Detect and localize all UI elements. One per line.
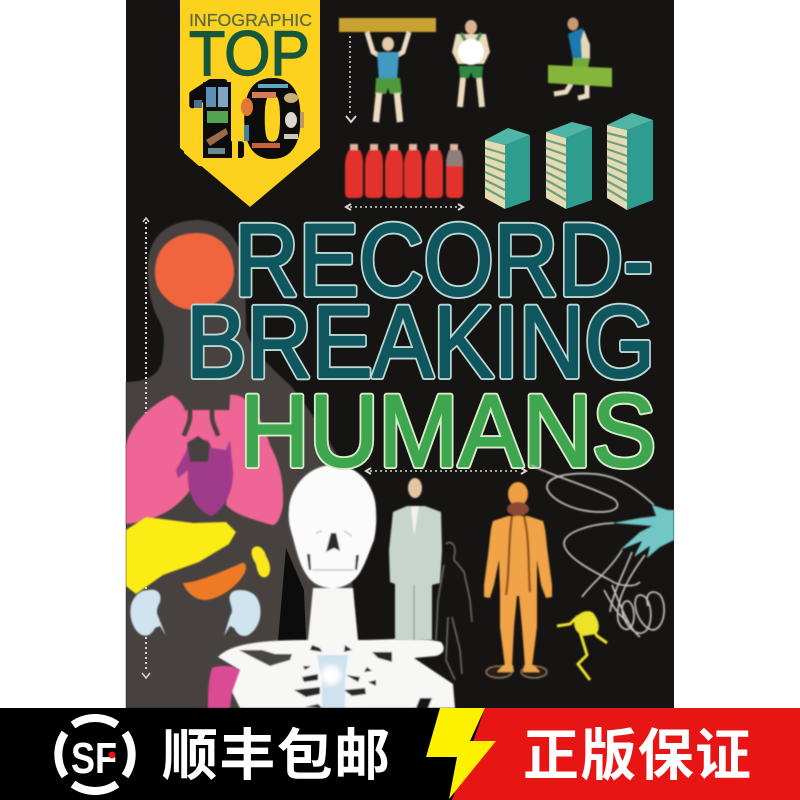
title line: HUMANS: HUMANS (240, 374, 656, 488)
stacks of money (485, 113, 653, 210)
10: 0 (243, 60, 302, 178)
stack 1 (485, 128, 530, 209)
badge (180, 0, 320, 207)
tall man in suit (389, 478, 442, 640)
10 (184, 60, 304, 178)
shorts (375, 78, 402, 94)
height arrow: plank (346, 36, 356, 122)
icon: SF logo (58, 718, 132, 791)
legs (376, 93, 400, 122)
rib gaps (239, 645, 432, 708)
organ: shoulder joint (208, 666, 242, 708)
icon: SF logo: SF (71, 734, 117, 783)
title line: BREAKING: BREAKING (186, 285, 655, 399)
block (548, 65, 612, 87)
icon: lightning bolt (426, 708, 496, 799)
banner: genuine guarantee text: 正版保证 (523, 724, 751, 787)
bottle 6 (446, 150, 463, 198)
banner: black section (0, 708, 800, 800)
giant hand (613, 505, 674, 558)
width arrow: bottles (346, 204, 463, 210)
strongman 3: carrying block (548, 18, 612, 98)
stone (458, 39, 484, 65)
bottle 4 (404, 150, 422, 198)
trachea (184, 393, 218, 436)
series name: INFOGRAPHIC (189, 10, 312, 30)
title (186, 203, 656, 488)
title line: RECORD-: RECORD- (234, 203, 653, 317)
bottle caps (350, 144, 458, 150)
body silhouette (126, 220, 360, 708)
stack 2 (546, 122, 592, 209)
organ: spleen (252, 546, 270, 577)
vest (377, 52, 399, 82)
organ: pancreas (183, 563, 246, 600)
strongman 1: lifting plank (339, 18, 436, 122)
skull (289, 465, 376, 588)
organ: liver (126, 517, 236, 594)
neck (308, 588, 358, 640)
body (484, 516, 552, 667)
title line: HUMANS: HUMANS (240, 374, 656, 488)
organ: heart (176, 436, 233, 516)
book cover background (126, 0, 674, 708)
bottle 1 (345, 150, 363, 198)
ribcage (218, 639, 455, 708)
title line: RECORD-: RECORD- (234, 203, 653, 317)
strongman 2: holding stone (452, 20, 490, 107)
arms (367, 32, 409, 56)
TOP: TOP (189, 19, 310, 89)
organ: lungs (126, 393, 283, 525)
skeleton (218, 465, 455, 708)
bottle 5 (425, 150, 443, 198)
foot of the 1 trimmed to match the plain numeral (184, 130, 203, 166)
sternum (317, 655, 348, 708)
toenails (486, 666, 512, 678)
plank (339, 18, 436, 32)
long beard hair (506, 516, 530, 595)
title line: BREAKING: BREAKING (186, 285, 655, 399)
nose and jaw (307, 533, 359, 570)
short man outline (436, 542, 472, 680)
organ: brain (155, 233, 234, 310)
10: 1 (185, 60, 244, 178)
yellow hurdler (557, 611, 607, 680)
width arrow: tall and hairy men (366, 468, 526, 474)
dimension arrow: body height (142, 218, 150, 678)
beard (507, 502, 529, 516)
bottle 2 (365, 150, 383, 198)
long fingernails (531, 465, 664, 637)
bottles (345, 144, 463, 198)
black gap between arm and neck (278, 548, 306, 641)
banner: red section (452, 708, 800, 800)
head (508, 482, 528, 506)
bottle 3 (385, 150, 403, 198)
banner: free shipping text: 顺丰包邮 (162, 724, 390, 787)
head (382, 37, 394, 51)
organ: kidneys (130, 590, 261, 636)
hairy man (484, 482, 552, 678)
stack 3 (607, 113, 653, 210)
